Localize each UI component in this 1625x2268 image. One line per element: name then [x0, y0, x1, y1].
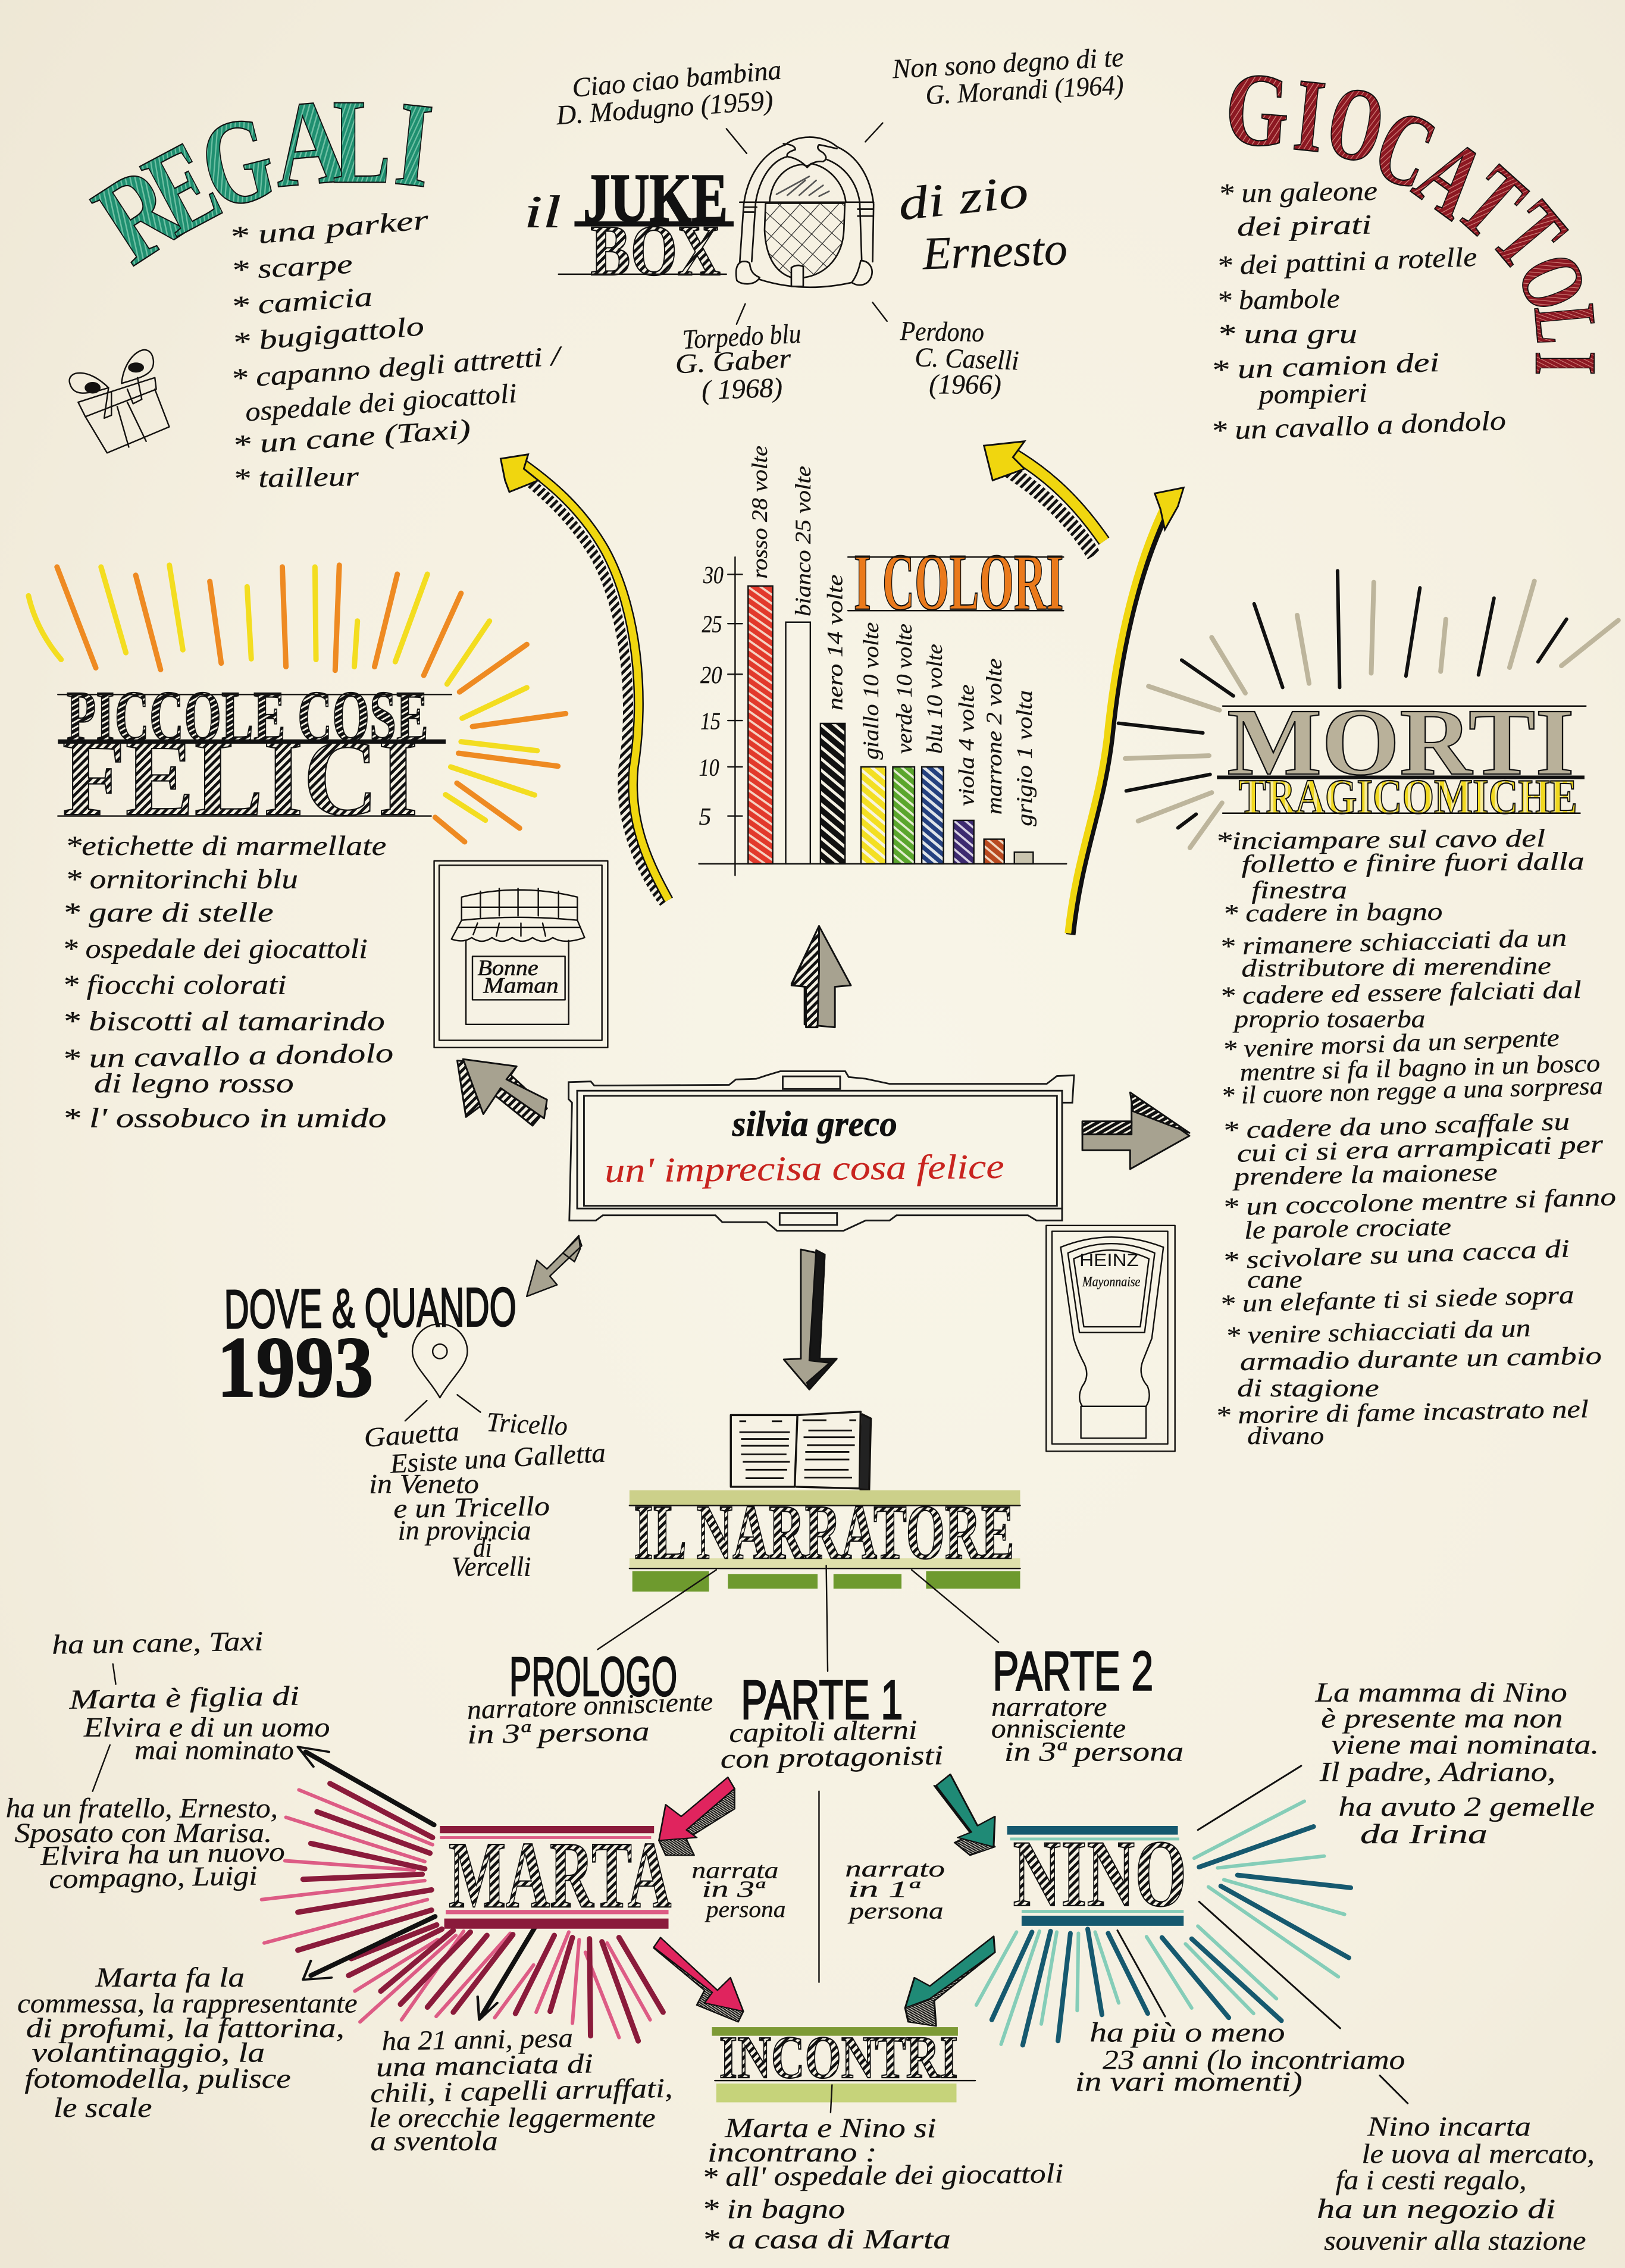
song labels: Ciao ciao bambina	[571, 54, 782, 103]
text: book title: un' imprecisa cosa felice	[605, 1147, 1004, 1190]
places text: Gauetta	[363, 1416, 461, 1453]
icon: gift	[70, 350, 170, 453]
list: piccole cose felici: * fiocchi colorati	[62, 970, 287, 1000]
ornate frame	[569, 1072, 1074, 1231]
list: morti tragicomiche: cane	[1247, 1265, 1302, 1293]
list: piccole cose felici: * ospedale dei giocattoli	[62, 933, 368, 964]
song labels: D. Modugno (1959)	[555, 85, 774, 130]
list: morti tragicomiche: * il cuore non regge a una sorpresa	[1221, 1072, 1604, 1110]
heading: il juke box	[524, 160, 1068, 291]
bar chart: 5	[699, 803, 711, 830]
heading: il juke box: JUKE	[583, 160, 728, 237]
list: regali items: * camicia	[230, 281, 374, 321]
arrow: felici to regali	[500, 455, 669, 903]
notes: nino: le uova al mercato,	[1361, 2139, 1595, 2169]
song labels: (1966)	[929, 369, 1001, 399]
heading: GIOCATTOLI: G	[1222, 50, 1293, 170]
song labels: C. Caselli	[915, 342, 1019, 375]
bar: verde	[893, 767, 915, 864]
block: parte 1: con protagonisti	[720, 1740, 944, 1774]
heading: REGALI: G	[188, 88, 287, 236]
bar labels: rosso 28 volte	[748, 446, 772, 579]
panel: i colori chart	[699, 446, 1066, 875]
notes: marta: Marta fa la	[95, 1962, 245, 1993]
panel: il narratore	[597, 1412, 1020, 1671]
bar: viola	[954, 820, 974, 864]
list: piccole cose felici: * biscotti al tamarindo	[62, 1006, 385, 1036]
notes: marta: le scale	[54, 2092, 152, 2123]
notes: marta: Elvira e di un uomo	[83, 1712, 330, 1742]
places text: in provincia	[398, 1515, 531, 1546]
notes: marta: ha 21 anni, pesa	[381, 2022, 573, 2056]
list: giocattoli items: pompieri	[1257, 377, 1367, 410]
text: narrata: narrata	[691, 1858, 778, 1884]
heading: incontri: INCONTRI	[719, 2024, 958, 2091]
rays: nino	[976, 1766, 1408, 2103]
list: incontri: Marta e Nino si	[724, 2113, 936, 2143]
notes: marta: compagno, Luigi	[49, 1860, 258, 1894]
notes: nino: in vari momenti)	[1075, 2066, 1302, 2097]
heading: REGALI: E	[124, 114, 240, 261]
block: prologo: in 3ª persona	[467, 1716, 650, 1749]
text: narrato: persona	[847, 1899, 944, 1924]
divider: marta nino	[818, 1791, 819, 1982]
list: morti tragicomiche	[1215, 825, 1616, 1450]
heading: GIOCATTOLI: C	[1360, 86, 1450, 212]
list: morti tragicomiche: divano	[1247, 1422, 1324, 1450]
notes: marta: a sventola	[371, 2126, 498, 2156]
list: morti tragicomiche: cui ci si era arrampicati per	[1236, 1130, 1604, 1168]
heading: REGALI: R	[73, 138, 206, 290]
heading: REGALI	[73, 74, 438, 290]
block: parte 2	[991, 1640, 1183, 1767]
song labels: Torpedo blu	[682, 318, 802, 355]
notes: nino: ha avuto 2 gemelle	[1338, 1791, 1595, 1822]
places text: e un Tricello	[393, 1490, 550, 1524]
text: narrata: persona	[705, 1897, 786, 1922]
panel: dove e quando	[217, 1276, 606, 1581]
notes: marta: commessa, la rappresentante	[17, 1988, 358, 2019]
places text: Tricello	[486, 1406, 568, 1441]
bar labels: bianco 25 volte	[791, 466, 815, 616]
list: morti tragicomiche: * un coccolone mentre si fanno	[1222, 1183, 1616, 1221]
heading: nino	[1007, 1821, 1186, 1926]
bar: bianco	[786, 622, 810, 864]
arrow: centre to dove e quando	[527, 1236, 582, 1296]
list: morti tragicomiche: di stagione	[1237, 1374, 1379, 1402]
song labels: Perdono	[900, 315, 984, 347]
panel: title frame	[569, 1072, 1074, 1231]
bar chart: 10	[699, 754, 719, 781]
notes: marta: mai nominato	[134, 1735, 294, 1765]
arrow: centre to narratore	[784, 1249, 837, 1389]
notes: marta: Marta è figlia di	[68, 1680, 300, 1715]
panel: piccole cose felici	[29, 565, 608, 1133]
list: incontri	[702, 2113, 1064, 2254]
list: incontri: * all' ospedale dei giocattoli	[702, 2158, 1064, 2192]
heading: il narratore	[630, 1489, 1020, 1592]
panel: marta	[6, 1625, 673, 2156]
heading: marta: MARTA	[449, 1822, 671, 1928]
heading: REGALI: A	[268, 74, 352, 214]
heading: GIOCATTOLI: L	[1515, 301, 1616, 347]
heading: nino: NINO	[1013, 1821, 1186, 1926]
bar: nero	[821, 723, 845, 864]
heading: REGALI: L	[333, 74, 391, 209]
list: piccole cose felici: * l' ossobuco in umido	[62, 1102, 386, 1133]
icon: heinz mayonnaise: HEINZ	[1079, 1251, 1139, 1270]
icon: heinz mayonnaise: Mayonnaise	[1082, 1274, 1140, 1290]
icon: map pin	[405, 1324, 480, 1421]
bar: giallo	[861, 767, 885, 864]
notes: marta: Sposato con Marisa.	[14, 1818, 272, 1848]
places text: in Veneto	[369, 1469, 479, 1499]
panel: regali	[70, 74, 564, 494]
bar labels: giallo 10 volte	[859, 622, 883, 760]
list: regali items: * tailleur	[233, 461, 360, 494]
notes: nino: è presente ma non	[1321, 1703, 1563, 1734]
places text: Esiste una Galletta	[389, 1437, 606, 1479]
heading: GIOCATTOLI: T	[1438, 145, 1547, 260]
panel: juke box	[524, 42, 1125, 405]
block: prologo: PROLOGO	[509, 1646, 677, 1708]
list: morti tragicomiche: prendere la maionese	[1232, 1158, 1498, 1191]
heading: il juke box: BOX	[590, 211, 721, 291]
heading: marta	[440, 1822, 671, 1929]
bar labels: grigio 1 volta	[1013, 690, 1037, 826]
song labels: G. Gaber	[675, 343, 793, 379]
block: parte 2: onnisciente	[991, 1713, 1126, 1744]
bar labels	[748, 446, 1037, 826]
connector lines	[597, 1565, 998, 1671]
panel: nino	[976, 1677, 1599, 2256]
places text: Vercelli	[452, 1551, 531, 1581]
heading: I COLORI: I COLORI	[854, 538, 1063, 627]
song labels	[555, 42, 1125, 405]
list: morti tragicomiche: * scivolare su una cacca di	[1222, 1235, 1570, 1275]
list: piccole cose felici: di legno rosso	[94, 1068, 294, 1098]
panel: incontri	[702, 2024, 1064, 2254]
bar: blu	[922, 767, 944, 864]
arrow: centre to felici	[457, 1059, 547, 1126]
block: parte 1: PARTE 1	[741, 1669, 903, 1731]
heading: GIOCATTOLI	[1222, 50, 1616, 375]
list: morti tragicomiche: mentre si fa il bagno in un bosco	[1239, 1050, 1601, 1087]
heading: piccole cose felici: FELICI	[62, 716, 418, 838]
arrow: marta to incontri	[654, 1938, 743, 2022]
list: incontri: * a casa di Marta	[702, 2224, 951, 2254]
block: parte 1	[720, 1669, 944, 1774]
heading: il juke box: Ernesto	[921, 223, 1068, 279]
text: narrato: in 1ª	[848, 1877, 921, 1902]
heading: REGALI: I	[390, 75, 438, 213]
places text	[363, 1406, 606, 1581]
places text: di	[473, 1533, 492, 1563]
bar: grigio	[1015, 852, 1033, 864]
list: regali items: ospedale dei giocattoli	[245, 378, 518, 427]
rays: yellow and orange	[29, 565, 566, 842]
text: narrato: narrato	[845, 1856, 945, 1882]
rays: marta	[262, 1752, 663, 2041]
list: regali items: * scarpe	[230, 249, 353, 285]
list: morti tragicomiche: le parole crociate	[1244, 1213, 1451, 1245]
list: morti tragicomiche: *inciampare sul cavo del	[1215, 825, 1545, 856]
list: giocattoli items: * un galeone	[1218, 176, 1377, 208]
list: morti tragicomiche: proprio tosaerba	[1232, 1005, 1425, 1033]
list: morti tragicomiche: * morire di fame incastrato nel	[1215, 1395, 1589, 1430]
list: morti tragicomiche: * cadere in bagno	[1223, 898, 1443, 928]
list: regali items: * una parker	[228, 204, 430, 252]
bar: rosso	[748, 586, 773, 864]
list: giocattoli items: * un cavallo a dondolo	[1210, 405, 1507, 446]
bar chart: 15	[700, 707, 721, 735]
arrow: morti to giocattoli	[1068, 488, 1183, 935]
list: giocattoli items: * dei pattini a rotelle	[1216, 242, 1477, 281]
notes: marta: le orecchie leggermente	[369, 2103, 656, 2133]
list: piccole cose felici: *etichette di marmellate	[65, 831, 386, 861]
panel: giocattoli	[1210, 50, 1616, 446]
list: morti tragicomiche: * cadere ed essere falciati dal	[1219, 976, 1582, 1010]
list: morti tragicomiche: * venire morsi da un serpente	[1222, 1024, 1560, 1064]
heading: il narratore: IL NARRATORE	[634, 1489, 1015, 1575]
heading: piccole cose felici: PICCOLE COSE	[67, 677, 428, 757]
notes: nino: viene mai nominata.	[1331, 1729, 1599, 1759]
bar labels: nero 14 volte	[823, 574, 847, 710]
notes: nino: ha più o meno	[1089, 2017, 1285, 2047]
list: regali items	[228, 204, 564, 494]
notes: nino: souvenir alla stazione	[1324, 2226, 1586, 2256]
notes: nino: 23 anni (lo incontriamo	[1103, 2045, 1405, 2075]
bar chart: 20	[700, 661, 722, 688]
icon: open book	[731, 1412, 871, 1490]
heading: il juke box: il	[524, 186, 562, 237]
heading: il juke box: di zio	[896, 165, 1031, 230]
list: morti tragicomiche: * un elefante ti si siede sopra	[1219, 1281, 1574, 1318]
song labels: ( 1968)	[701, 372, 783, 405]
bar: marrone	[984, 839, 1004, 864]
list: incontri: * in bagno	[702, 2194, 845, 2224]
notes: marta: una manciata di	[376, 2048, 593, 2082]
list: morti tragicomiche: * venire schiacciati da un	[1225, 1314, 1531, 1350]
notes: nino	[1075, 1677, 1599, 2256]
bar labels: verde 10 volte	[893, 624, 916, 754]
bar labels: marrone 2 volte	[982, 659, 1006, 815]
song labels: Non sono degno di te	[891, 42, 1125, 84]
bar chart	[699, 446, 1066, 875]
icon: bonne maman jar: Bonne	[478, 956, 538, 980]
block: prologo	[466, 1646, 713, 1749]
block: parte 2: in 3ª persona	[1004, 1737, 1183, 1767]
notes: nino: ha un negozio di	[1317, 2194, 1555, 2224]
notes: marta: ha un fratello, Ernesto,	[6, 1793, 278, 1823]
text: narrata: in 3ª	[702, 1877, 766, 1902]
bar chart: 30	[703, 561, 724, 588]
heading: morti tragicomiche: MORTI	[1227, 689, 1574, 795]
heading: dove e quando: DOVE & QUANDO	[224, 1276, 516, 1340]
list: morti tragicomiche: distributore di merendine	[1241, 952, 1551, 983]
heading: GIOCATTOLI: I	[1289, 57, 1330, 175]
list: piccole cose felici: * un cavallo a dondolo	[62, 1038, 394, 1074]
bar chart: 25	[702, 610, 722, 638]
notes: marta: chili, i capelli arruffati,	[370, 2073, 673, 2109]
heading: GIOCATTOLI: O	[1498, 240, 1607, 324]
list: regali items: * capanno degli attretti /	[230, 340, 564, 394]
notes: nino: da Irina	[1360, 1819, 1488, 1849]
text: narrata	[691, 1858, 786, 1922]
text: author: silvia greco	[732, 1104, 897, 1144]
arrow: centre to chart	[791, 926, 851, 1028]
heading: GIOCATTOLI: A	[1397, 115, 1507, 240]
notes: marta: Elvira ha un nuovo	[39, 1837, 285, 1871]
bar labels: viola 4 volte	[955, 684, 979, 806]
heading: I COLORI	[848, 538, 1063, 627]
block: parte 2: narratore	[991, 1691, 1107, 1722]
list: morti tragicomiche: armadio durante un cambio	[1239, 1342, 1602, 1376]
list: morti tragicomiche: * cadere da uno scaffale su	[1222, 1108, 1570, 1145]
rays: black and tan	[1119, 571, 1618, 848]
arrow: parte 1 to nino	[934, 1774, 995, 1855]
list: giocattoli items: dei pirati	[1237, 209, 1372, 242]
black arrow heads	[298, 1747, 497, 2020]
list: regali items: * un cane (Taxi)	[231, 413, 472, 461]
list: morti tragicomiche: finestra	[1252, 876, 1347, 904]
block: parte 1: capitoli alterni	[729, 1714, 918, 1748]
list: giocattoli items: * bambole	[1216, 283, 1340, 315]
notes: marta: di profumi, la fattorina,	[26, 2013, 345, 2043]
icon: jukebox	[736, 137, 873, 287]
text: narrato	[845, 1856, 945, 1924]
list: giocattoli items: * un camion dei	[1210, 347, 1440, 385]
heading: GIOCATTOLI: O	[1317, 63, 1394, 187]
song labels: G. Morandi (1964)	[925, 70, 1125, 110]
list: piccole cose felici: * gare di stelle	[62, 897, 274, 928]
icon: bonne maman jar	[434, 861, 608, 1048]
notes: marta: ha un cane, Taxi	[52, 1625, 264, 1660]
list: piccole cose felici	[62, 831, 394, 1133]
notes: marta	[6, 1625, 673, 2156]
notes: nino: Nino incarta	[1367, 2111, 1531, 2141]
icon: heinz mayonnaise	[1046, 1226, 1175, 1451]
list: giocattoli items	[1210, 176, 1507, 446]
block: prologo: narratore onnisciente	[466, 1686, 713, 1725]
list: morti tragicomiche: * rimanere schiacciati da un	[1219, 924, 1567, 961]
year: 1993: 1993	[217, 1319, 373, 1415]
list: regali items: * bugigattolo	[231, 311, 425, 358]
arrow: parte 1 to marta	[659, 1777, 735, 1855]
arrow: colori to juke box	[984, 441, 1104, 556]
notes: marta: volantinaggio, la	[32, 2037, 265, 2067]
bar labels: blu 10 volte	[923, 644, 947, 754]
list: piccole cose felici: * ornitorinchi blu	[65, 864, 298, 894]
heading: GIOCATTOLI: I	[1517, 351, 1615, 375]
panel: morti tragicomiche	[1046, 571, 1618, 1451]
heading: GIOCATTOLI: T	[1471, 182, 1588, 289]
notes: nino: Il padre, Adriano,	[1319, 1757, 1555, 1787]
icon: bonne maman jar: Maman	[483, 973, 559, 997]
notes: nino: La mamma di Nino	[1314, 1677, 1567, 1708]
list: giocattoli items: * una gru	[1217, 318, 1357, 349]
notes: nino: fa i cesti regalo,	[1336, 2164, 1527, 2195]
list: incontri: incontrano :	[707, 2137, 877, 2167]
list: morti tragicomiche: folletto e finire fuori dalla	[1241, 847, 1585, 878]
arrow: centre to morti	[1082, 1092, 1189, 1169]
block: parte 2: PARTE 2	[992, 1640, 1153, 1702]
notes: marta: fotomodella, pulisce	[24, 2063, 291, 2094]
arrow: nino to incontri	[905, 1936, 995, 2026]
